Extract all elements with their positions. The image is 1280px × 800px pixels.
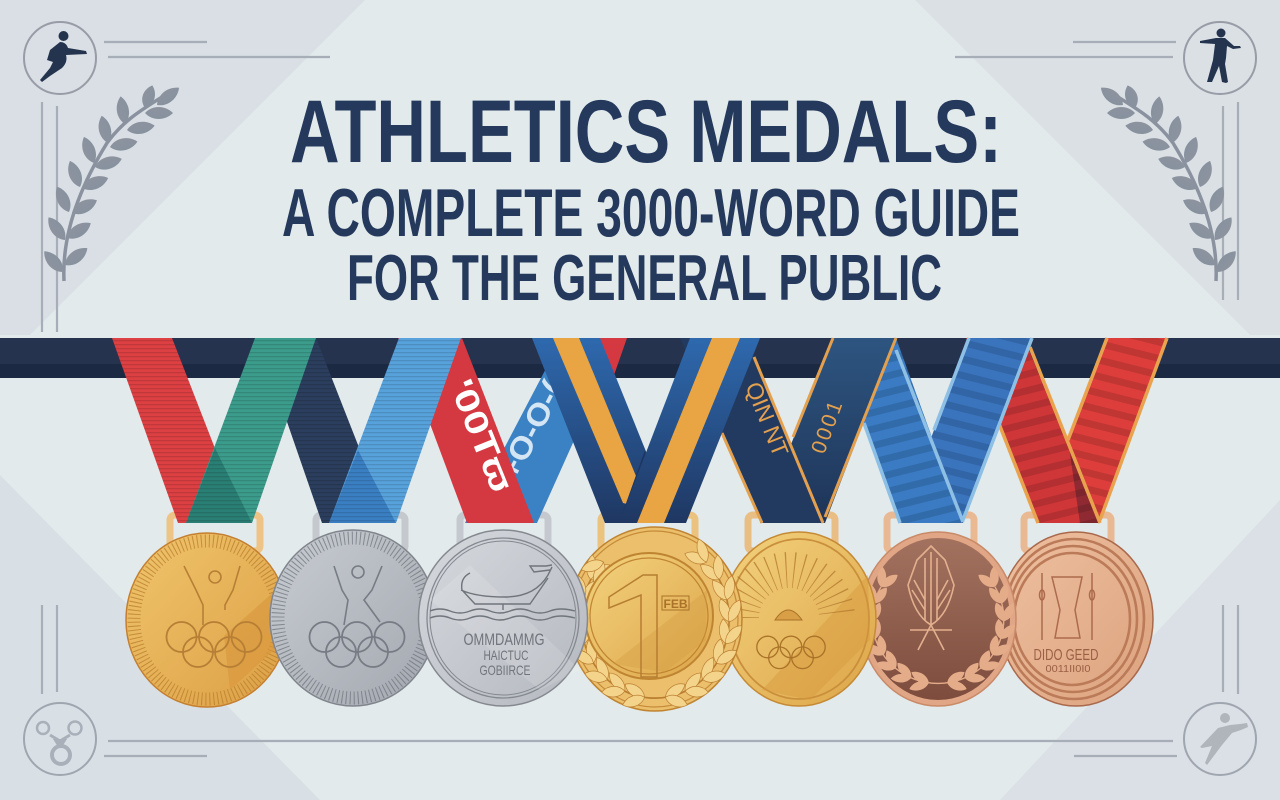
title: FOR THE GENERAL PUBLIC <box>347 241 942 314</box>
ribbon pair 2: red and blue with text: '00Tϖ <box>443 374 521 497</box>
medal 3: silver boat <box>418 530 588 706</box>
ribbon pair 1 <box>112 338 360 523</box>
medal 2: silver athlete <box>270 530 436 706</box>
corner icon: standing athlete <box>1184 22 1256 94</box>
ribbon pair 7: red <box>966 338 1167 523</box>
title <box>282 81 1020 314</box>
laurel right <box>1097 83 1240 281</box>
title: ATHLETICS MEDALS: <box>290 81 1002 181</box>
medal 6: bronze with wreath <box>857 532 1019 706</box>
medal loops <box>170 515 1111 551</box>
ribbon pair 5: navy with gold text: QIN NT <box>740 378 794 460</box>
medal 4: gold number one: FEB <box>664 597 688 611</box>
laurel left <box>40 83 183 281</box>
medal 7: copper with glass: DIDO GEED <box>1034 647 1098 664</box>
hanging bar <box>0 338 1280 378</box>
ribbon pair 2: red and blue with text: +O-O-( <box>491 374 571 485</box>
medal 3: silver boat: HAICTUC <box>484 647 528 663</box>
corner icon: rings <box>24 703 96 775</box>
ribbon pair 4: blue and gold <box>532 338 760 523</box>
ribbon pair 2: red and blue with text <box>329 338 620 523</box>
ribbon pair 5: navy with gold text <box>680 338 896 523</box>
corner icon: diving athlete <box>1184 703 1256 775</box>
medal 3: silver boat: GOBIIRCE <box>480 662 530 678</box>
medal 5: gold sunrise <box>722 532 876 706</box>
ribbon pair 5: navy with gold text: 0001 <box>807 398 847 457</box>
corner icon: runner <box>24 22 96 94</box>
medal 1: gold athlete <box>126 533 288 707</box>
medal 4: gold number one <box>563 527 747 713</box>
medal 3: silver boat: OMMDAMMG <box>464 630 544 649</box>
ribbon pair 6: blue <box>832 338 1032 523</box>
medal 7: copper with glass: 0011II0I0 <box>1046 664 1091 675</box>
medal 7: copper with glass <box>999 532 1153 706</box>
